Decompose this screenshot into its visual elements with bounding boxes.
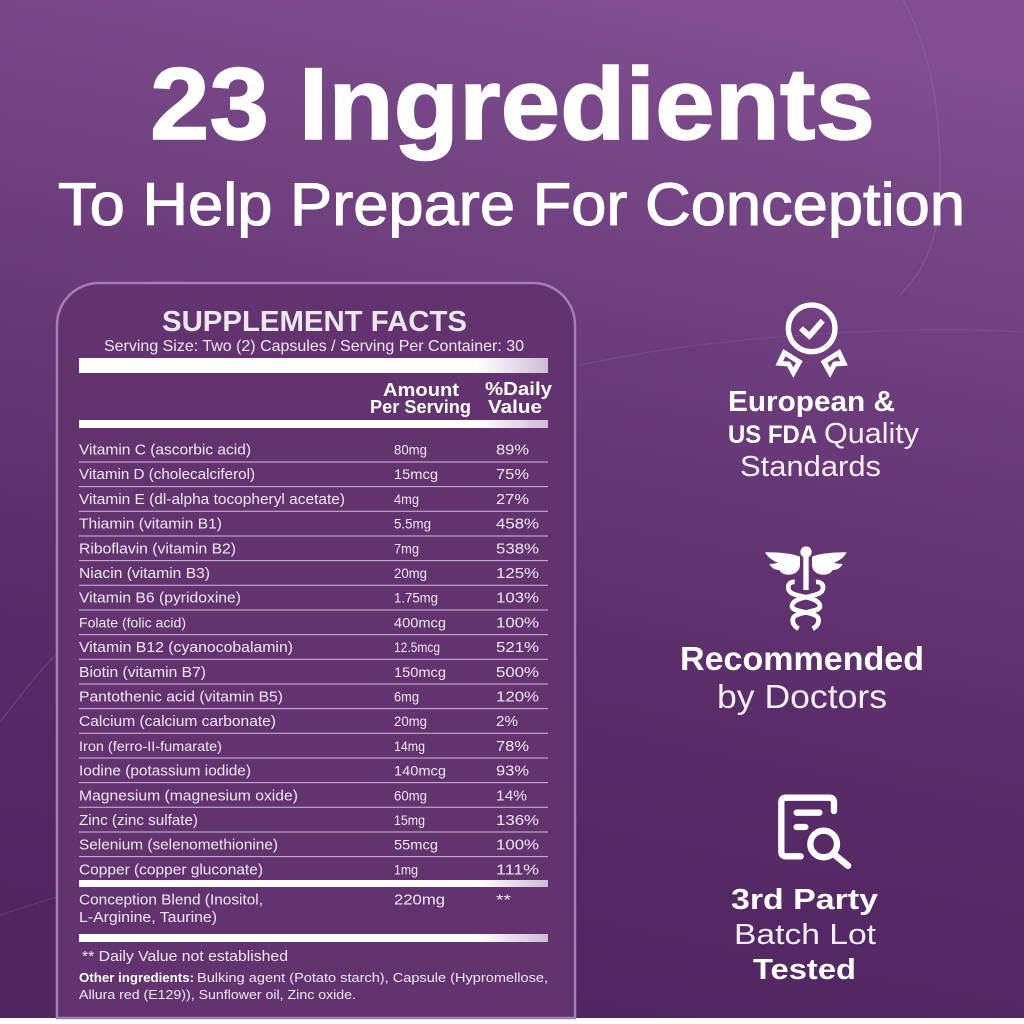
text: quality standards xyxy=(728,386,920,483)
ingredient rows: Folate (folic acid) xyxy=(79,614,186,630)
ingredient rows: 150mcg xyxy=(394,665,446,680)
text: third party tested xyxy=(731,884,878,986)
text: third party tested: Batch Lot xyxy=(734,919,876,951)
ingredient rows: 20mg xyxy=(394,714,427,729)
text: recommended by doctors xyxy=(680,640,924,715)
ingredient rows xyxy=(79,442,539,878)
ingredient rows: 120% xyxy=(496,690,539,706)
ingredient rows: Riboflavin (vitamin B2) xyxy=(79,540,236,557)
ingredient rows: 14mg xyxy=(394,739,425,754)
ingredient rows: 60mg xyxy=(394,788,427,803)
ingredient rows: Pantothenic acid (vitamin B5) xyxy=(79,688,283,706)
text: recommended by doctors: by Doctors xyxy=(717,678,887,715)
ingredient rows: 14% xyxy=(496,788,527,804)
conception blend row xyxy=(79,892,511,926)
ingredient rows: Vitamin B6 (pyridoxine) xyxy=(79,590,241,607)
ingredient rows: Vitamin D (cholecalciferol) xyxy=(79,466,255,483)
text: recommended by doctors: Recommended xyxy=(680,640,924,677)
ingredient rows: 500% xyxy=(496,665,539,681)
ingredient rows: 20mg xyxy=(394,566,427,581)
ingredient rows: Vitamin B12 (cyanocobalamin) xyxy=(79,639,293,656)
ingredient rows: Calcium (calcium carbonate) xyxy=(79,713,276,730)
daily value note: ** Daily Value not established xyxy=(82,948,288,965)
ingredient rows: 6mg xyxy=(394,690,419,704)
ingredient rows: Copper (copper gluconate) xyxy=(79,861,263,878)
column headers: Value xyxy=(488,397,542,417)
ingredient rows: 78% xyxy=(496,739,529,755)
ingredient rows: 1.75mg xyxy=(394,591,438,606)
text: third party tested: Tested xyxy=(753,954,856,986)
conception blend row: Conception Blend (Inositol, xyxy=(79,892,263,908)
ingredient rows: Vitamin C (ascorbic acid) xyxy=(79,442,251,458)
ingredient rows: Niacin (vitamin B3) xyxy=(79,565,210,582)
table heading: SUPPLEMENT FACTS xyxy=(162,306,467,338)
ingredient rows: 55mcg xyxy=(394,838,438,853)
ingredient rows: 15mcg xyxy=(394,467,438,482)
ingredient rows: Biotin (vitamin B7) xyxy=(79,664,206,681)
text: quality standards: Quality xyxy=(824,418,920,450)
panel: supplement facts xyxy=(57,283,575,1018)
ingredient rows: 1mg xyxy=(394,862,418,877)
ingredient rows: Selenium (selenomethionine) xyxy=(79,837,278,854)
text: quality standards: Standards xyxy=(740,451,881,483)
ingredient rows: 136% xyxy=(496,813,539,829)
ingredient rows: 111% xyxy=(496,862,539,878)
ingredient rows: 103% xyxy=(496,591,539,607)
ingredient rows: 7mg xyxy=(394,541,419,556)
ingredient rows: 5.5mg xyxy=(394,517,431,532)
icon: caduceus xyxy=(765,546,847,629)
ingredient rows: 12.5mcg xyxy=(394,640,440,655)
ingredient rows: 75% xyxy=(496,467,529,483)
text: quality standards: US FDA xyxy=(728,421,817,449)
ingredient rows: 27% xyxy=(496,492,529,508)
conception blend row: L-Arginine, Taurine) xyxy=(79,909,217,926)
ingredient rows: 140mcg xyxy=(394,764,446,779)
conception blend row: ** xyxy=(496,892,511,908)
title: 23 Ingredients xyxy=(150,47,875,161)
ingredient rows: Thiamin (vitamin B1) xyxy=(79,516,222,533)
column headers: %Daily xyxy=(485,379,552,399)
serving size: Serving Size: Two (2) Capsules / Serving Per Container: 30 xyxy=(104,338,524,355)
ingredient rows: 2% xyxy=(496,714,518,730)
column headers: Per Serving xyxy=(370,397,471,417)
ingredient rows: Magnesium (magnesium oxide) xyxy=(79,787,298,804)
icon: award ribbon xyxy=(779,305,844,373)
ingredient rows: 400mcg xyxy=(394,615,446,630)
ingredient rows: 4mg xyxy=(394,492,419,507)
ingredient rows: 458% xyxy=(496,517,539,533)
ingredient rows: 89% xyxy=(496,442,529,458)
ingredient rows: 100% xyxy=(496,615,539,631)
ingredient rows: 100% xyxy=(496,838,539,854)
ingredient rows: Iron (ferro-II-fumarate) xyxy=(79,738,222,754)
icon: document search xyxy=(781,798,848,866)
ingredient rows: 521% xyxy=(496,640,539,656)
other ingredients xyxy=(79,970,548,1002)
conception blend row: 220mg xyxy=(394,892,445,908)
other ingredients: Bulking agent (Potato starch), Capsule (Hypromellose, xyxy=(197,970,548,985)
ingredient rows: 538% xyxy=(496,541,539,557)
column headers xyxy=(370,379,552,417)
subtitle: To Help Prepare For Conception xyxy=(58,171,965,238)
text: quality standards: European & xyxy=(728,386,895,418)
ingredient rows: Iodine (potassium iodide) xyxy=(79,763,251,780)
ingredient rows: 15mg xyxy=(394,813,425,828)
ingredient rows: Vitamin E (dl-alpha tocopheryl acetate) xyxy=(79,491,345,508)
ingredient rows: Zinc (zinc sulfate) xyxy=(79,812,198,829)
other ingredients: Allura red (E129)), Sunflower oil, Zinc oxide. xyxy=(79,987,356,1002)
text: third party tested: 3rd Party xyxy=(731,884,878,916)
ingredient rows: 80mg xyxy=(394,442,427,458)
ingredient rows: 125% xyxy=(496,566,539,582)
other ingredients: Other ingredients: xyxy=(79,970,194,985)
column headers: Amount xyxy=(383,380,459,400)
ingredient rows: 93% xyxy=(496,764,529,780)
